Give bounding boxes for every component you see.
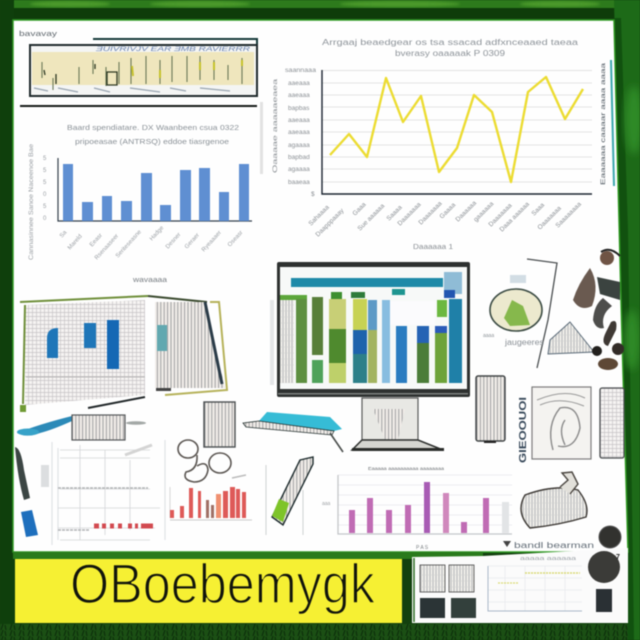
bar chart: blue bars: Hadge [149,225,166,242]
icon: green marker [266,457,313,535]
line chart: Daaaaaaa [487,202,514,228]
vertical dark label: GIEOOUOI [518,397,529,463]
icons: dark seeds [573,250,624,370]
keypad sheet [600,388,624,458]
icon: black pen [15,447,30,500]
bar chart: blue bars: Rsenaaseer [94,233,120,261]
dark block icon [596,589,612,612]
bar chart: blue bars: Eeasr [89,233,104,248]
line chart: baaeaa [288,179,310,186]
line chart: Oaaaaaaa [536,205,563,231]
bar chart: blue bars: Desner [165,232,182,250]
line chart: bapbad [288,154,310,161]
bar chart title: Baard spendiatare. DX Waanbeen csua 0322 [67,123,239,132]
small table [72,415,125,440]
panel: photo strip: ƎUIVRIVJV EAR ƎMB RAVIERRR [94,47,251,53]
line chart: Daaaaaa [454,200,478,223]
bar chart title [67,123,239,146]
banner title: OBoebemygk [70,552,376,615]
bar chart: blue bars [29,123,252,261]
purple bar chart [322,466,512,551]
bar chart: blue bars: Cannasinnee Sanoe Naceenoe Bae [29,143,35,260]
cards [420,565,476,618]
panel: white sheet [13,20,628,552]
left folder label: wavaaaa [132,277,167,284]
line chart: saannaaa [285,67,316,74]
black rule [20,105,257,107]
side label strip: Eaaaaaa caaaar aaaa aaaa [601,62,607,185]
purple bar chart: aaa [322,501,331,507]
line chart: Gaaaa [438,201,457,220]
line chart: Sahaaaa [307,204,331,227]
icon: blue block [21,510,38,537]
green band under sheet [13,552,483,559]
line chart: Saaaaaaaa [554,201,583,229]
line chart [272,38,592,251]
line chart: aaeaaa [288,129,310,136]
number seven: 7 [616,554,620,561]
bar chart: blue bars: Geraer [184,232,201,250]
bar chart title: pripoeasae (ANTRSQ) eddoe tiasrgenoe [75,137,229,146]
line chart: Daaa aaaaaa [498,201,531,233]
folder with blue charts [20,296,227,412]
line chart: Oaaaae aaaaaeaea [272,78,279,173]
line chart: bapbas [288,105,310,112]
caption lower right [503,541,594,550]
line chart: Daaaaaaa [417,200,444,226]
icon: fan sheet [548,322,594,354]
bar chart: blue bars: Seriteseasne [115,229,143,259]
faint vertical strip [260,102,263,174]
line chart title: bverasy oaaaaak P 0309 [395,49,506,58]
bar chart: blue bars: 5 [43,168,47,174]
sketch labels [483,333,544,347]
bar chart: blue bars: 5 [43,156,47,162]
bar chart: blue bars: 5 [43,204,47,210]
bar chart: blue bars: Oseasr [227,230,244,248]
monitor [277,262,470,451]
monitor stand [352,398,444,451]
line chart: Daaaaaaa [396,201,423,227]
caption lower right: bandl bearman [514,541,594,550]
faint monitor shadow [270,300,274,385]
line chart: Saaa [530,201,546,217]
line chart: Daaaaaa 1 [413,244,453,251]
purple bar chart: Eaaaaa aaaaaaaaaa aaaaaaaa [368,466,445,471]
bar chart: blue bars: 0 [43,192,47,198]
line chart: agaaaa [288,166,310,173]
bar chart: blue bars: Ryeaaaer [201,230,223,253]
sketch labels: jaugeeres [504,338,544,347]
mini line chart [488,556,582,611]
small top label: bavavay [19,31,58,38]
line chart: Saaaa [385,204,404,222]
purple bar chart: P A S [416,545,429,551]
bar chart: blue bars: Mareld [67,234,84,251]
bar chart: blue bars: Sa [59,229,69,239]
line chart title: Arrgaaj beaedgear os tsa ssacad adfxnceaaed taeaa [322,38,579,47]
line chart: Gaaa [351,201,368,217]
line chart: agaaaa [288,142,310,149]
bar chart: blue bars: 0 [43,216,47,222]
monitor dashboard columns [280,272,462,383]
icon: round disc [599,526,621,548]
line chart: gaaaaaa [472,200,496,223]
small table top centre [204,402,235,447]
bar chart: blue bars: 5 [43,180,47,186]
small tablet right [476,376,505,443]
globe sketch [490,275,542,331]
mini line chart: aaaaa aaaaaa [520,556,576,562]
red bar chart [170,487,252,520]
swirl doodle [178,440,246,482]
icon: blue pen [17,416,146,436]
sketch chart with red bars [41,440,165,545]
line chart: Daapppaaay [314,207,346,238]
line chart: aaeaaa [288,92,310,99]
line chart: aaeaaa [288,80,310,87]
panel: lower right dashboard [412,548,628,623]
slanted paper edge [527,259,557,368]
icon: teal tablet [243,412,343,452]
panel: photo strip [30,39,257,96]
side label strip [601,60,614,186]
line chart title [322,38,579,58]
line chart: Sue aaaaaa [356,202,386,232]
line chart: aaeaaa [288,117,310,124]
yellow title banner [15,552,402,623]
dark round icon [588,551,620,583]
line chart: $ [311,191,315,198]
sleeping bag sketch [521,472,587,528]
sketch labels: aaaa [483,333,494,339]
anatomy paper [532,387,591,459]
